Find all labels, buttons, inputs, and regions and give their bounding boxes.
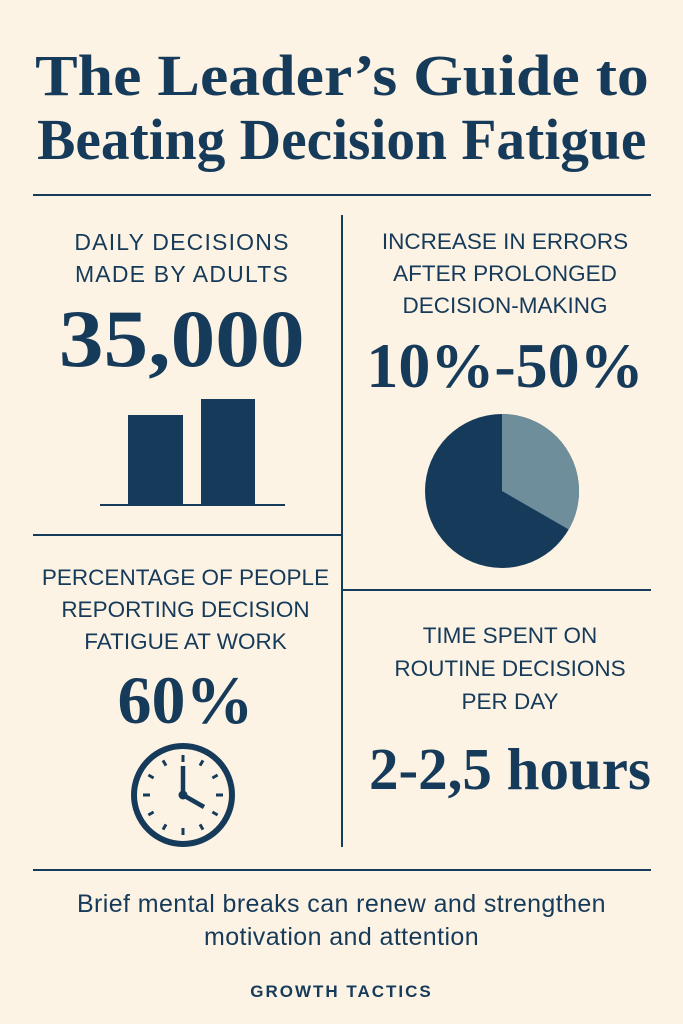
number: 60% (118, 662, 254, 738)
panel: percentage (42, 565, 329, 738)
number: 2-2,5 hours (369, 736, 651, 802)
label: AFTER PROLONGED (393, 261, 617, 286)
label: DAILY DECISIONS (74, 229, 290, 255)
panel: daily decisions (59, 229, 305, 384)
panel: errors (366, 229, 644, 401)
pie chart (425, 414, 579, 568)
title: The Leader’s Guide to (35, 43, 648, 108)
icon: clock (131, 743, 235, 847)
label: FATIGUE AT WORK (84, 629, 287, 654)
label: PER DAY (461, 689, 559, 714)
label: DECISION-MAKING (402, 293, 608, 318)
label (382, 229, 628, 318)
label (74, 229, 290, 287)
label (42, 565, 329, 654)
label: INCREASE IN ERRORS (382, 229, 628, 254)
title: Beating Decision Fatigue (37, 107, 646, 172)
label: MADE BY ADULTS (75, 261, 289, 287)
footer text (77, 890, 606, 951)
label: ROUTINE DECISIONS (394, 656, 626, 681)
brand: GROWTH TACTICS (250, 982, 433, 1001)
footer text: motivation and attention (204, 923, 479, 951)
label: TIME SPENT ON (423, 623, 597, 648)
number: 35,000 (59, 293, 305, 384)
title (35, 43, 648, 172)
label: REPORTING DECISION (61, 597, 310, 622)
bar chart (100, 399, 285, 506)
panel: time spent (369, 623, 651, 802)
label: PERCENTAGE OF PEOPLE (42, 565, 329, 590)
footer text: Brief mental breaks can renew and strengthen (77, 890, 606, 918)
number: 10%-50% (366, 330, 644, 401)
label (394, 623, 626, 714)
